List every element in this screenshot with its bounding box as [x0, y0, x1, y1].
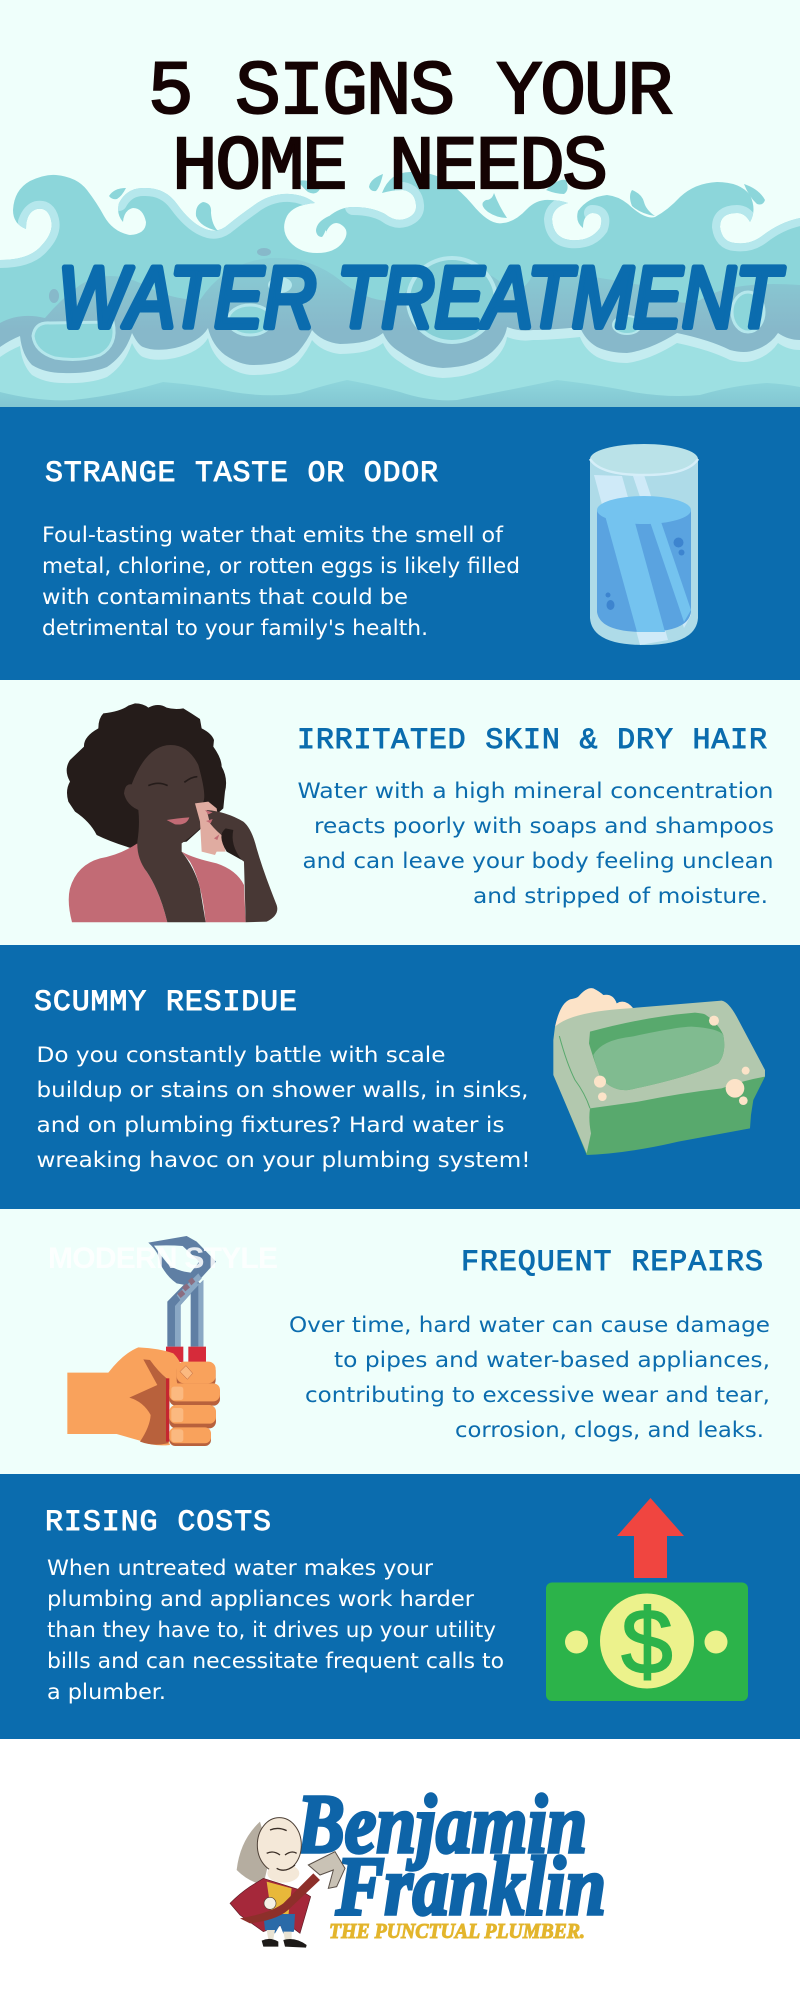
body text: metal, chlorine, or rotten eggs is likely filled — [42, 554, 520, 578]
title: 5 signs your home needs — [148, 50, 673, 211]
panel: irritated skin and dry hair — [0, 680, 800, 945]
body text: plumbing and appliances work harder — [47, 1587, 474, 1611]
body text — [289, 1313, 770, 1442]
body text: and can leave your body feeling unclean — [302, 849, 774, 873]
logo: Benjamin Franklin wordmark — [296, 1778, 606, 1933]
heading: IRRITATED SKIN & DRY HAIR — [297, 724, 767, 758]
title: 5 signs your home needs: HOME NEEDS — [172, 125, 608, 211]
icon: rising money — [546, 1498, 748, 1701]
icon: woman touching nose — [67, 703, 277, 922]
body text: corrosion, clogs, and leaks. — [455, 1418, 764, 1442]
body text: Foul-tasting water that emits the smell of — [42, 523, 504, 547]
body text: than they have to, it drives up your utility — [47, 1618, 496, 1642]
title: 5 signs your home needs: 5 SIGNS YOUR — [148, 50, 673, 136]
icon: soap bar — [553, 988, 765, 1155]
panel: header with waves — [0, 0, 800, 407]
panel: frequent repairs — [0, 1209, 800, 1474]
heading: STRANGE TASTE OR ODOR — [45, 457, 438, 491]
banknote: $ — [621, 1591, 673, 1693]
body text — [298, 779, 774, 908]
body text: and stripped of moisture. — [473, 884, 768, 908]
panel: footer logo — [0, 1739, 800, 2000]
body text — [47, 1556, 504, 1704]
logo: Benjamin Franklin wordmark: Benjamin — [296, 1778, 587, 1871]
body text: a plumber. — [47, 1680, 166, 1704]
heading: FREQUENT REPAIRS — [461, 1246, 763, 1280]
body text: to pipes and water-based appliances, — [334, 1348, 770, 1372]
body text: Do you constantly battle with scale — [36, 1043, 446, 1067]
heading: RISING COSTS — [45, 1506, 271, 1540]
panel: scummy residue — [0, 945, 800, 1209]
panel: strange taste or odor — [0, 407, 800, 680]
logo: Benjamin Franklin wordmark: Franklin — [335, 1840, 606, 1933]
water droplets — [109, 174, 765, 237]
arrow: up — [617, 1498, 684, 1578]
body text: reacts poorly with soaps and shampoos — [314, 814, 774, 838]
body text — [42, 523, 520, 640]
banknote — [546, 1582, 748, 1701]
body text: and on plumbing fixtures? Hard water is — [36, 1113, 504, 1137]
waves illustration — [0, 172, 800, 407]
icon: glass of water — [590, 444, 698, 645]
body text: wreaking havoc on your plumbing system! — [36, 1148, 530, 1172]
heading: SCUMMY RESIDUE — [34, 986, 297, 1020]
ghost text: modern style: MODERN STYLE — [48, 1242, 278, 1275]
panel: rising costs — [0, 1474, 800, 1739]
body text: bills and can necessitate frequent calls to — [47, 1649, 504, 1673]
body text: contributing to excessive wear and tear, — [305, 1383, 770, 1407]
logo: tagline: THE PUNCTUAL PLUMBER. — [329, 1919, 585, 1943]
body text: Water with a high mineral concentration — [298, 779, 774, 803]
body text — [36, 1043, 530, 1172]
body text: When untreated water makes your — [47, 1556, 433, 1580]
body text: Over time, hard water can cause damage — [289, 1313, 770, 1337]
logo: Ben Franklin mascot — [230, 1818, 345, 1948]
body text: with contaminants that could be — [42, 585, 408, 609]
body text: detrimental to your family's health. — [42, 616, 428, 640]
body text: buildup or stains on shower walls, in sinks, — [36, 1078, 528, 1102]
icon: hand holding pliers — [67, 1236, 220, 1446]
